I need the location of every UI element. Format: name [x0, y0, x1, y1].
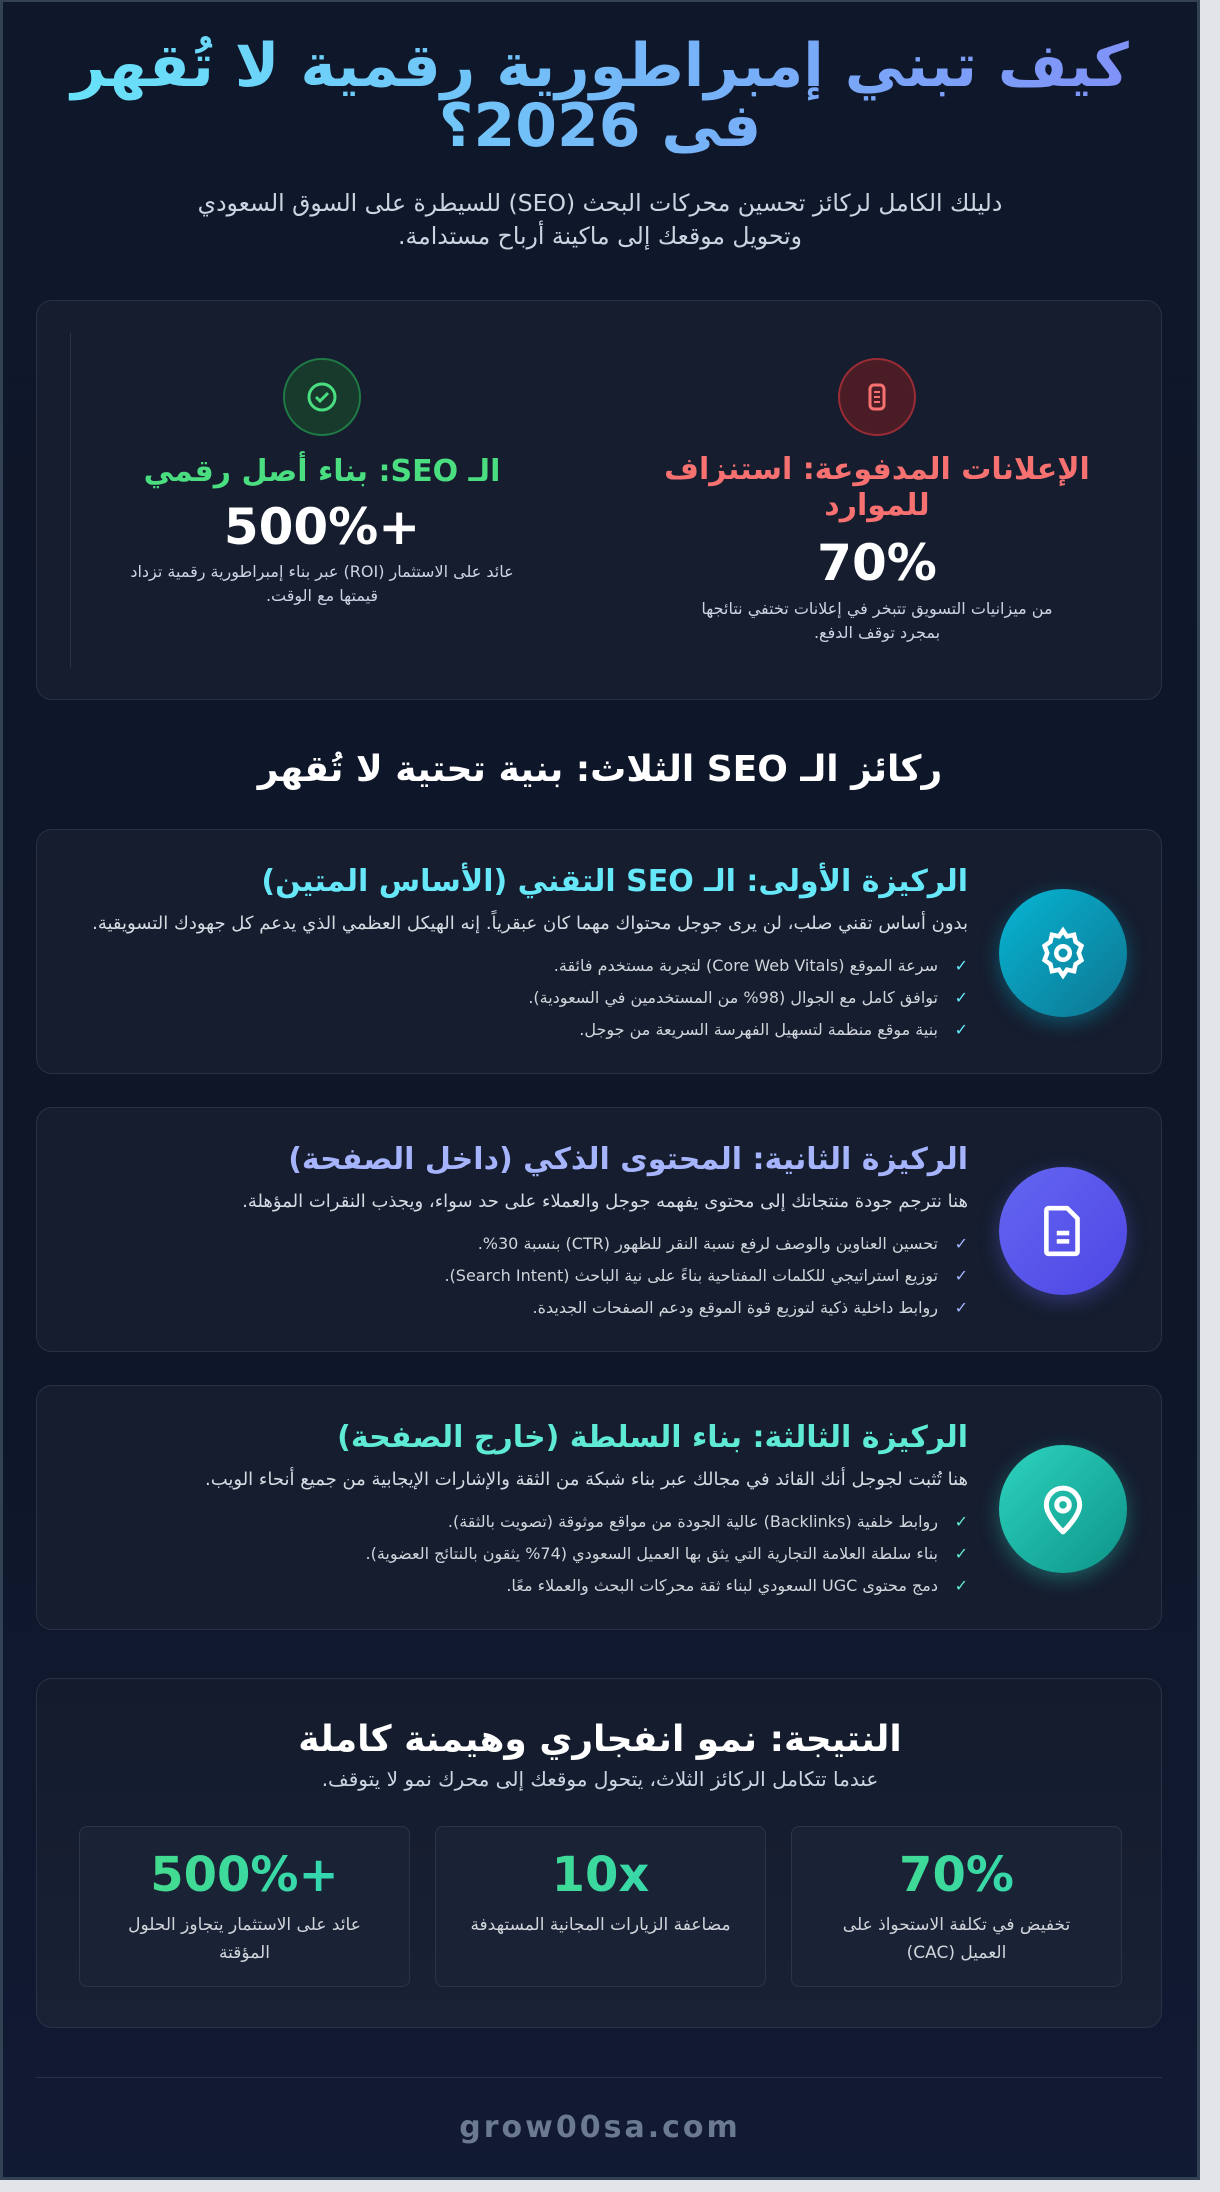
- heading: SEO: الـ SEO: بناء أصل رقمي: [144, 454, 500, 489]
- bullets: pillar 3: بناء سلطة العلامة التجارية التي يثق بها العميل السعودي (74% يثقون بالنتائج العضوية).: [366, 1544, 938, 1563]
- bullets: pillar 1: ✓: [955, 1020, 968, 1039]
- text: SEO: قيمتها مع الوقت.: [266, 586, 378, 605]
- bullets: pillar 3: ✓: [955, 1544, 968, 1563]
- panel: pillar 1: [36, 829, 1162, 1074]
- panel: comparison: [36, 300, 1162, 700]
- heading: paid ads: للموارد: [824, 488, 930, 523]
- text: paid ads: بمجرد توقف الدفع.: [814, 623, 940, 642]
- bullets: pillar 2: ✓: [955, 1234, 968, 1253]
- panel: results: [36, 1678, 1162, 2028]
- bullets: pillar 3: دمج محتوى UGC السعودي لبناء ثقة محركات البحث والعملاء معًا.: [506, 1576, 938, 1595]
- panel: pillar 2: [36, 1107, 1162, 1352]
- bullets: pillar 2: روابط داخلية ذكية لتوزيع قوة الموقع ودعم الصفحات الجديدة.: [533, 1298, 938, 1317]
- panel: pillar 3: [36, 1385, 1162, 1630]
- bullets: pillar 1: [528, 956, 968, 1039]
- stat: 70%: [791, 1826, 1122, 1987]
- bullets: pillar 3: ✓: [955, 1512, 968, 1531]
- bullets: pillar 1: بنية موقع منظمة لتسهيل الفهرسة السريعة من جوجل.: [579, 1020, 938, 1039]
- text: pillar 3: هنا تُثبت لجوجل أنك القائد في مجالك عبر بناء شبكة من الثقة والإشارات الإيجابية من جميع أنحاء الويب.: [205, 1469, 968, 1490]
- stat: 10x: مضاعفة الزيارات المجانية المستهدفة: [470, 1915, 731, 1935]
- text: SEO: [130, 562, 514, 605]
- subtitle: دليلك الكامل لركائز تحسين محركات البحث (SEO) للسيطرة على السوق السعودي: [198, 189, 1002, 217]
- heading: pillar 1: الركيزة الأولى: الـ SEO التقني (الأساس المتين): [261, 864, 968, 899]
- title: [0, 36, 1200, 156]
- stat: 500%+: 500%+: [224, 498, 420, 556]
- column: paid ads: [664, 358, 1090, 642]
- icon: document: [999, 1167, 1127, 1295]
- bullets: pillar 3: [366, 1512, 968, 1595]
- bullets: pillar 2: [444, 1234, 968, 1317]
- heading: pillar 3: الركيزة الثالثة: بناء السلطة (خارج الصفحة): [337, 1420, 968, 1455]
- stat: 70%: 70%: [899, 1847, 1014, 1903]
- text: pillar 1: بدون أساس تقني صلب، لن يرى جوجل محتواك مهما كان عبقرياً. إنه الهيكل العظمي الذي يدعم كل جهودك التسويقية.: [92, 913, 968, 934]
- bullets: pillar 1: توافق كامل مع الجوال (98% من المستخدمين في السعودية).: [528, 988, 938, 1007]
- icon: location pin: [999, 1445, 1127, 1573]
- icon: check: [283, 358, 361, 436]
- bullets: pillar 2: ✓: [955, 1298, 968, 1317]
- stat: 500%+: 500%+: [150, 1847, 339, 1903]
- subtitle: وتحويل موقعك إلى ماكينة أرباح مستدامة.: [398, 222, 802, 250]
- text: SEO: عائد على الاستثمار (ROI) عبر بناء إمبراطورية رقمية تزداد: [130, 562, 514, 581]
- bullets: pillar 3: ✓: [955, 1576, 968, 1595]
- title: كيف تبني إمبراطورية رقمية لا تُقهر: [71, 31, 1129, 101]
- subtitle: [198, 189, 1002, 250]
- bullets: pillar 1: سرعة الموقع (Core Web Vitals) لتجربة مستخدم فائقة.: [554, 956, 938, 975]
- bullets: pillar 2: توزيع استراتيجي للكلمات المفتاحية بناءً على نية الباحث (Search Intent).: [444, 1266, 938, 1285]
- heading: paid ads: [664, 452, 1090, 523]
- icon: paid ads: [838, 358, 916, 436]
- text: results subtitle: عندما تتكامل الركائز الثلاث، يتحول موقعك إلى محرك نمو لا يتوقف.: [322, 1767, 878, 1791]
- text: paid ads: [701, 599, 1053, 642]
- bullets: pillar 2: ✓: [955, 1266, 968, 1285]
- heading: results: النتيجة: نمو انفجاري وهيمنة كاملة: [298, 1719, 902, 1760]
- stat: 500%+: [79, 1826, 410, 1987]
- stat: 70%: تخفيض في تكلفة الاستحواذ على العميل (CAC): [843, 1915, 1070, 1963]
- stat: 10x: 10x: [552, 1847, 649, 1903]
- stat: 10x: [435, 1826, 766, 1987]
- stat: 70%: 70%: [817, 534, 937, 592]
- section heading: ركائز الـ SEO الثلاث: بنية تحتية لا تُقهر: [258, 749, 942, 790]
- text: paid ads: من ميزانيات التسويق تتبخر في إعلانات تختفي نتائجها: [701, 599, 1053, 618]
- footer: grow00sa.com: [459, 2110, 741, 2145]
- text: pillar 2: هنا نترجم جودة منتجاتك إلى محتوى يفهمه جوجل والعملاء على حد سواء، ويجذب النقرات المؤهلة.: [242, 1191, 968, 1212]
- stat: 500%+: عائد على الاستثمار يتجاوز الحلول المؤقتة: [128, 1915, 361, 1963]
- bullets: pillar 1: ✓: [955, 988, 968, 1007]
- column: SEO: [130, 358, 514, 605]
- title: في 2026؟: [439, 91, 761, 161]
- icon: gear: [999, 889, 1127, 1017]
- bullets: pillar 2: تحسين العناوين والوصف لرفع نسبة النقر للظهور (CTR) بنسبة 30%.: [478, 1234, 938, 1253]
- heading: paid ads: الإعلانات المدفوعة: استنزاف: [664, 452, 1090, 487]
- heading: pillar 2: الركيزة الثانية: المحتوى الذكي (داخل الصفحة): [288, 1142, 968, 1177]
- bullets: pillar 3: روابط خلفية (Backlinks) عالية الجودة من مواقع موثوقة (تصويت بالثقة).: [448, 1512, 938, 1531]
- bullets: pillar 1: ✓: [955, 956, 968, 975]
